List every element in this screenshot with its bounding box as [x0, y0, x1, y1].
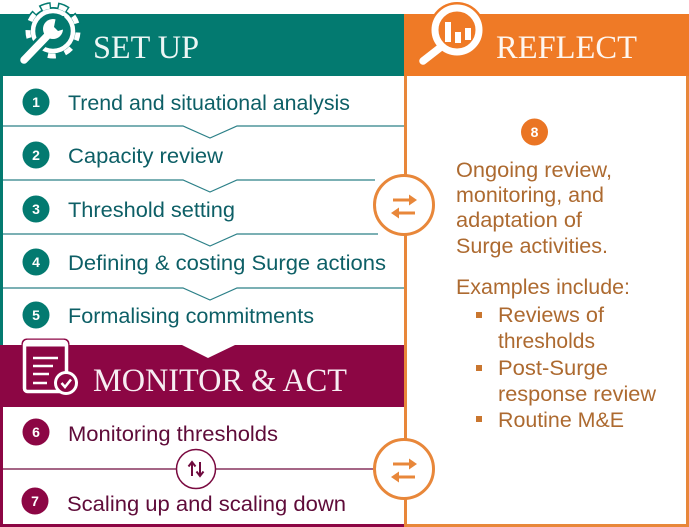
icon: exchange arrows bottom: [374, 440, 434, 498]
panel: reflect: [374, 2, 689, 526]
step 2: [22, 142, 223, 168]
text: examples list: [456, 275, 656, 432]
icon: gear and wrench: [24, 6, 78, 60]
text: ongoing review: monitoring, and: [456, 183, 604, 207]
reflect header band: [404, 14, 689, 76]
step 1: Trend and situational analysis: [68, 91, 350, 115]
step 5: 5: [32, 307, 40, 323]
step 3: Threshold setting: [68, 198, 235, 222]
icon: exchange arrows top: [374, 176, 434, 234]
step 1: 1: [32, 94, 40, 110]
monitor header band: [0, 345, 404, 407]
divider 4: [3, 288, 404, 300]
text: ongoing review: Ongoing review,: [456, 158, 612, 182]
step 6: Monitoring thresholds: [68, 422, 278, 446]
text: examples list: Examples include:: [456, 275, 630, 299]
step 3: [22, 196, 235, 222]
panel: monitor and act: [0, 338, 404, 527]
step 6: 6: [32, 424, 40, 440]
divider 3: [3, 234, 378, 246]
heading: monitor and act: MONITOR & ACT: [93, 363, 347, 399]
step 7: Scaling up and scaling down: [67, 492, 346, 516]
text: examples list: Reviews of: [498, 303, 604, 327]
step 5: Formalising commitments: [68, 304, 314, 328]
text: examples list: response review: [498, 382, 656, 406]
step 8 badge: [521, 118, 548, 146]
text: ongoing review: adaptation of: [456, 208, 582, 232]
divider 2: [3, 180, 375, 192]
heading: set up: SET UP: [93, 30, 199, 66]
step 4: Defining & costing Surge actions: [68, 251, 386, 275]
step 2: Capacity review: [68, 144, 223, 168]
icon: up and down arrows: [176, 450, 216, 488]
set up header band: [0, 14, 404, 76]
step 3: 3: [32, 201, 40, 217]
icon: checklist: [22, 338, 78, 395]
divider with scaling arrows: [3, 468, 374, 470]
heading: reflect: REFLECT: [496, 30, 637, 66]
text: examples list: Post-Surge: [498, 356, 608, 380]
step 2: 2: [32, 147, 40, 163]
text: examples list: Routine M&E: [498, 408, 624, 432]
text: ongoing review: [456, 158, 612, 258]
text: examples list: thresholds: [498, 329, 595, 353]
icon: magnifier with bars: [423, 2, 485, 61]
step 8 badge: 8: [531, 124, 539, 140]
text: ongoing review: Surge activities.: [456, 234, 608, 258]
step 7: 7: [31, 493, 39, 509]
step 4: 4: [32, 254, 40, 270]
divider 1: [3, 126, 404, 138]
panel: set up: [0, 6, 404, 345]
